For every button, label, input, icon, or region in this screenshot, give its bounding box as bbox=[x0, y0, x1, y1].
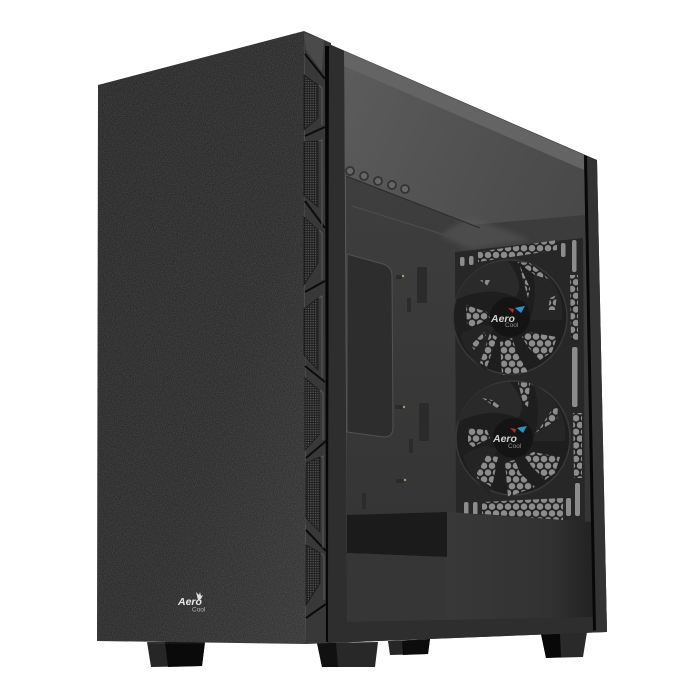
logo: upper fan Aerocool: Cool bbox=[505, 322, 519, 329]
feet bbox=[147, 632, 587, 667]
side vent strip bbox=[304, 31, 331, 644]
glass top band bbox=[344, 51, 584, 170]
bottom rail bbox=[328, 617, 606, 643]
logo: lower fan Aerocool: Aero bbox=[492, 433, 518, 445]
screws bbox=[346, 167, 409, 193]
cable cutout bbox=[347, 254, 393, 437]
motherboard tray bbox=[346, 176, 592, 623]
right frame bbox=[584, 155, 607, 632]
vents bbox=[304, 75, 320, 605]
hub bbox=[490, 297, 530, 337]
top honeycomb strip bbox=[478, 240, 557, 262]
PSU shroud bbox=[347, 512, 593, 622]
hub bbox=[493, 418, 533, 458]
bottom honeycomb strip bbox=[482, 498, 563, 520]
logo: front panel Aerocool: Aero bbox=[177, 596, 203, 608]
logo: upper fan Aerocool: Aero bbox=[490, 313, 516, 325]
logo: front panel Aerocool: Cool bbox=[192, 606, 206, 614]
fan: lower bbox=[456, 381, 570, 497]
outer frame bbox=[328, 44, 607, 643]
upper interior bbox=[344, 51, 592, 623]
ledge line bbox=[440, 216, 530, 250]
fan mounting plate bbox=[455, 238, 585, 522]
logo: front panel Aerocool bbox=[177, 592, 206, 614]
logo: lower fan Aerocool: Cool bbox=[508, 443, 522, 450]
logo: lower fan Aerocool bbox=[492, 426, 527, 450]
ribs bbox=[305, 54, 326, 618]
tray slots and standoffs bbox=[362, 267, 429, 509]
right honeycomb strips bbox=[570, 275, 578, 340]
logo: upper fan Aerocool bbox=[490, 306, 525, 329]
front panel bbox=[97, 31, 306, 644]
slots bbox=[460, 240, 580, 516]
fan: upper bbox=[453, 260, 567, 375]
left glass frame bbox=[328, 44, 347, 643]
glass side panel bbox=[328, 44, 607, 643]
